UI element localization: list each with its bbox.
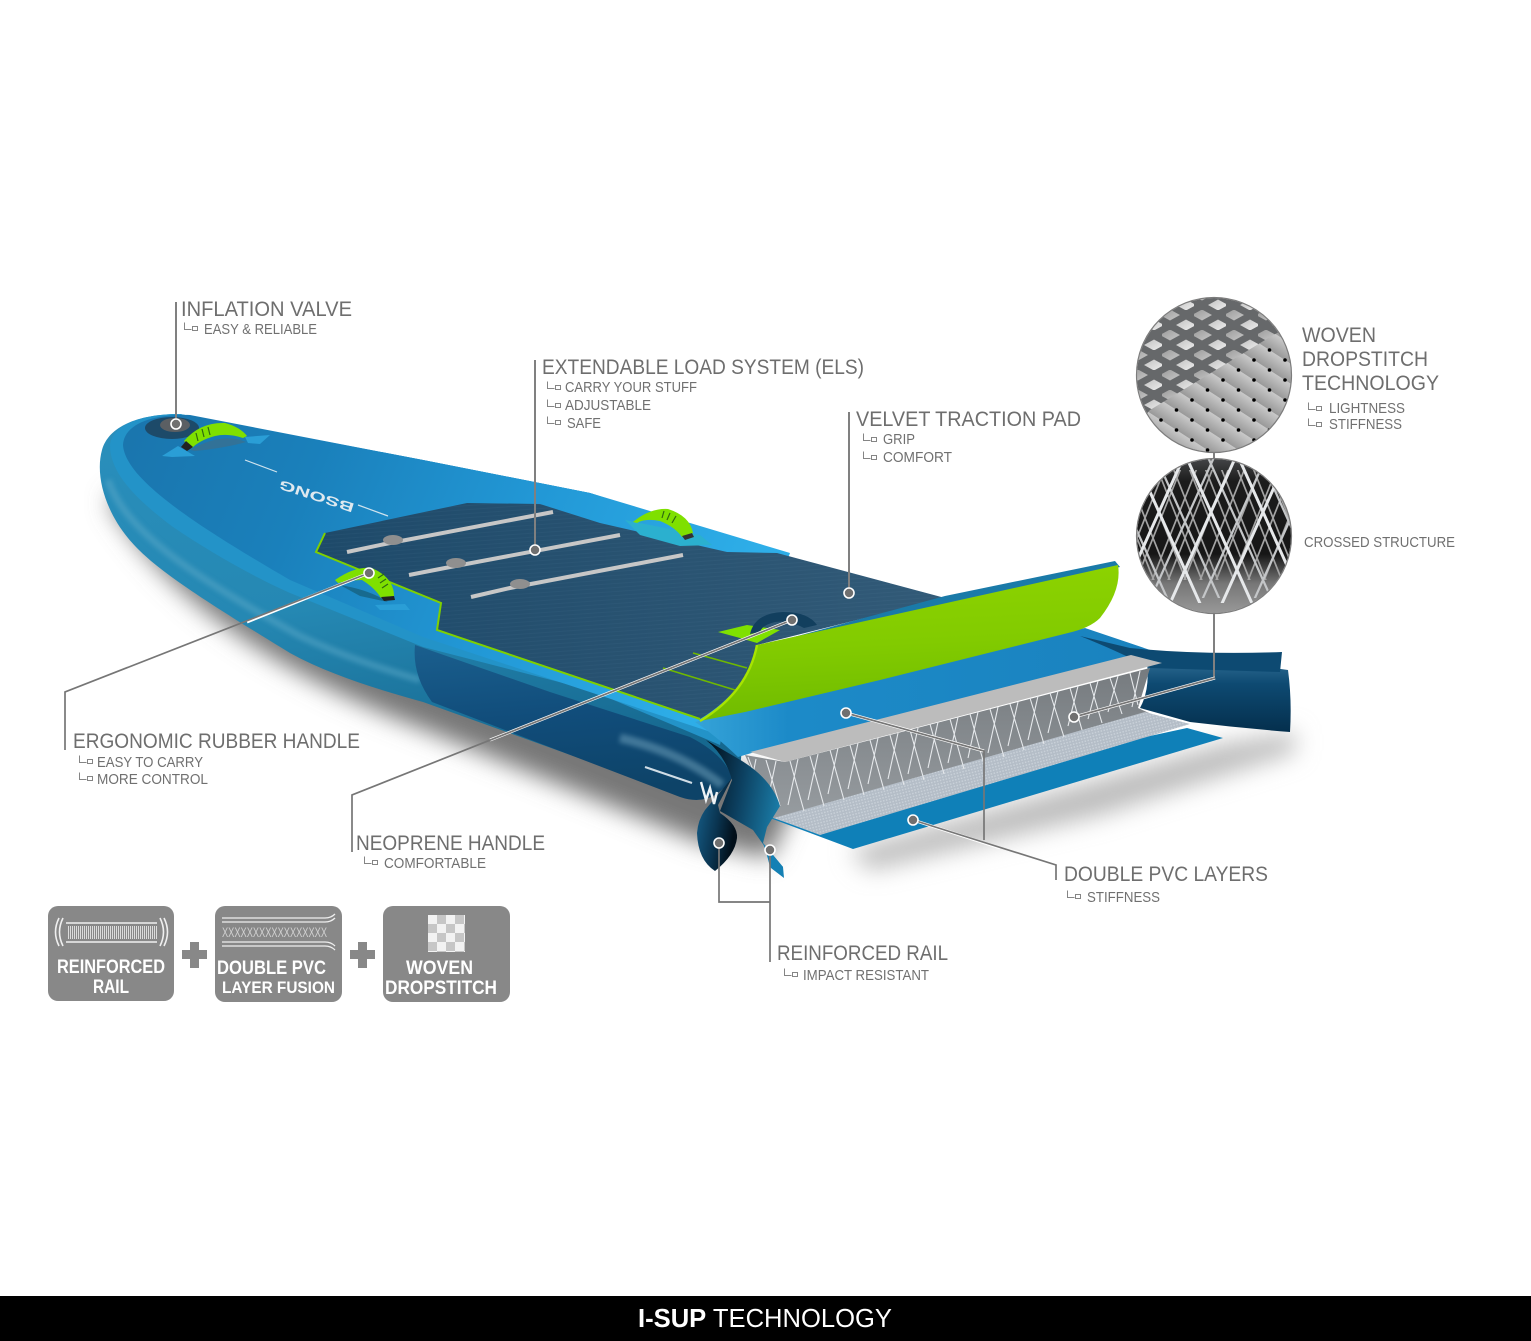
callout: velvet traction pad [844, 408, 1081, 598]
bullet list: SAFE [567, 415, 601, 432]
bullet list: GRIP [883, 431, 915, 448]
strap 2 [409, 535, 620, 575]
badge: reinforced rail [48, 906, 174, 1001]
middle handle [625, 509, 712, 546]
inflation valve [145, 417, 199, 439]
badge: woven dropstitch [383, 906, 510, 1002]
bullet: STIFFNESS [1087, 889, 1160, 906]
tail right lobe [706, 740, 783, 877]
label: crossed structure: CROSSED STRUCTURE [1304, 534, 1455, 551]
badge: double pvc layer fusion [215, 906, 342, 1002]
tail left lobe [697, 778, 737, 871]
rear tail body [1140, 663, 1291, 732]
bullet list: MORE CONTROL [97, 771, 208, 788]
grey top layer [750, 655, 1162, 762]
callout: extendable load system [530, 356, 864, 555]
deck surface [123, 415, 790, 735]
base mesh [745, 668, 1160, 833]
callout: ergonomic rubber handle [65, 568, 374, 788]
strap 1 [347, 512, 553, 552]
front handle [162, 423, 270, 457]
badge: woven dropstitch: DROPSTITCH [385, 978, 497, 999]
plus sign [182, 942, 207, 968]
bullet list: EASY TO CARRY [97, 754, 203, 771]
rail highlight soft [620, 738, 722, 785]
inner blue layer [695, 628, 1165, 757]
callout leader: dropstitch [1069, 450, 1215, 722]
footer title bar [0, 1296, 1531, 1341]
heading: WOVEN [1302, 324, 1376, 347]
dark rail section [415, 645, 732, 800]
plus sign [350, 942, 375, 968]
bullet list: STIFFNESS [1329, 416, 1402, 433]
callout: woven dropstitch [1302, 324, 1439, 433]
badge: reinforced rail: RAIL [93, 977, 129, 998]
rail rim [110, 414, 760, 745]
tail fin tip [763, 843, 784, 878]
top edge of flap [757, 561, 1120, 647]
side handle [335, 568, 410, 610]
bottom blue layer [770, 728, 1223, 849]
bullet: COMFORTABLE [384, 855, 486, 872]
icon: layered fabric: XXXXXXXXXXXXXXXXX [222, 924, 327, 940]
bullet list [80, 754, 208, 788]
heading: INFLATION VALVE [181, 298, 352, 321]
callout: inflation valve [171, 298, 352, 429]
callout: woven dropstitch: TECHNOLOGY [1302, 372, 1439, 395]
board rail [100, 414, 760, 798]
neoprene handle [718, 612, 817, 643]
callout: reinforced rail [714, 838, 948, 984]
green flap [700, 565, 1119, 721]
board shadow [108, 480, 800, 858]
heading: REINFORCED RAIL [777, 942, 948, 965]
pad sheen [316, 503, 945, 719]
bullet: IMPACT RESISTANT [803, 967, 929, 984]
deck logo: BSONG [277, 477, 356, 515]
strap 3 [471, 555, 683, 597]
bullet list: LIGHTNESS [1329, 400, 1405, 417]
bullet: EASY & RELIABLE [204, 321, 317, 338]
flap edge [700, 645, 757, 721]
drop stitch threads [748, 671, 1140, 811]
detail circle: woven fabric [1136, 296, 1292, 454]
heading: DOUBLE PVC LAYERS [1064, 863, 1268, 886]
badge: double pvc layer fusion: DOUBLE PVC [217, 958, 326, 979]
badge: woven dropstitch: WOVEN [406, 958, 473, 979]
callout: neoprene handle [352, 615, 797, 872]
heading: VELVET TRACTION PAD [856, 408, 1081, 431]
bullet list: CARRY YOUR STUFF [565, 379, 697, 396]
heading: EXTENDABLE LOAD SYSTEM (ELS) [542, 356, 864, 379]
light mesh strip [774, 712, 1190, 835]
icon: rail section [56, 918, 168, 946]
layers shadow [850, 732, 1295, 870]
callout: double pvc layers [841, 708, 1268, 906]
rail streak [645, 767, 692, 783]
icon: woven checker [428, 915, 465, 952]
bullet list [864, 431, 952, 466]
traction pad [316, 503, 945, 719]
pad green trim [316, 533, 700, 719]
badge: double pvc layer fusion: LAYER FUSION [222, 978, 335, 997]
logo mark [701, 782, 717, 804]
rear tail strip [1080, 636, 1282, 672]
bullet list: ADJUSTABLE [565, 397, 651, 414]
bullet list [548, 379, 697, 432]
rail highlight [108, 480, 420, 680]
callout: woven dropstitch: DROPSTITCH [1302, 348, 1428, 371]
heading: ERGONOMIC RUBBER HANDLE [73, 730, 360, 753]
paddle board cutaway illustration [100, 414, 1295, 878]
bullet list: COMFORT [883, 449, 952, 466]
deck line [245, 460, 388, 516]
pad slits [663, 653, 747, 690]
bullet list [1308, 400, 1405, 433]
heading: NEOPRENE HANDLE [356, 832, 545, 855]
footer title bar: I-SUP TECHNOLOGY [638, 1303, 892, 1333]
badge: reinforced rail: REINFORCED [57, 957, 165, 978]
detail circle: crossed structure [1136, 458, 1292, 614]
